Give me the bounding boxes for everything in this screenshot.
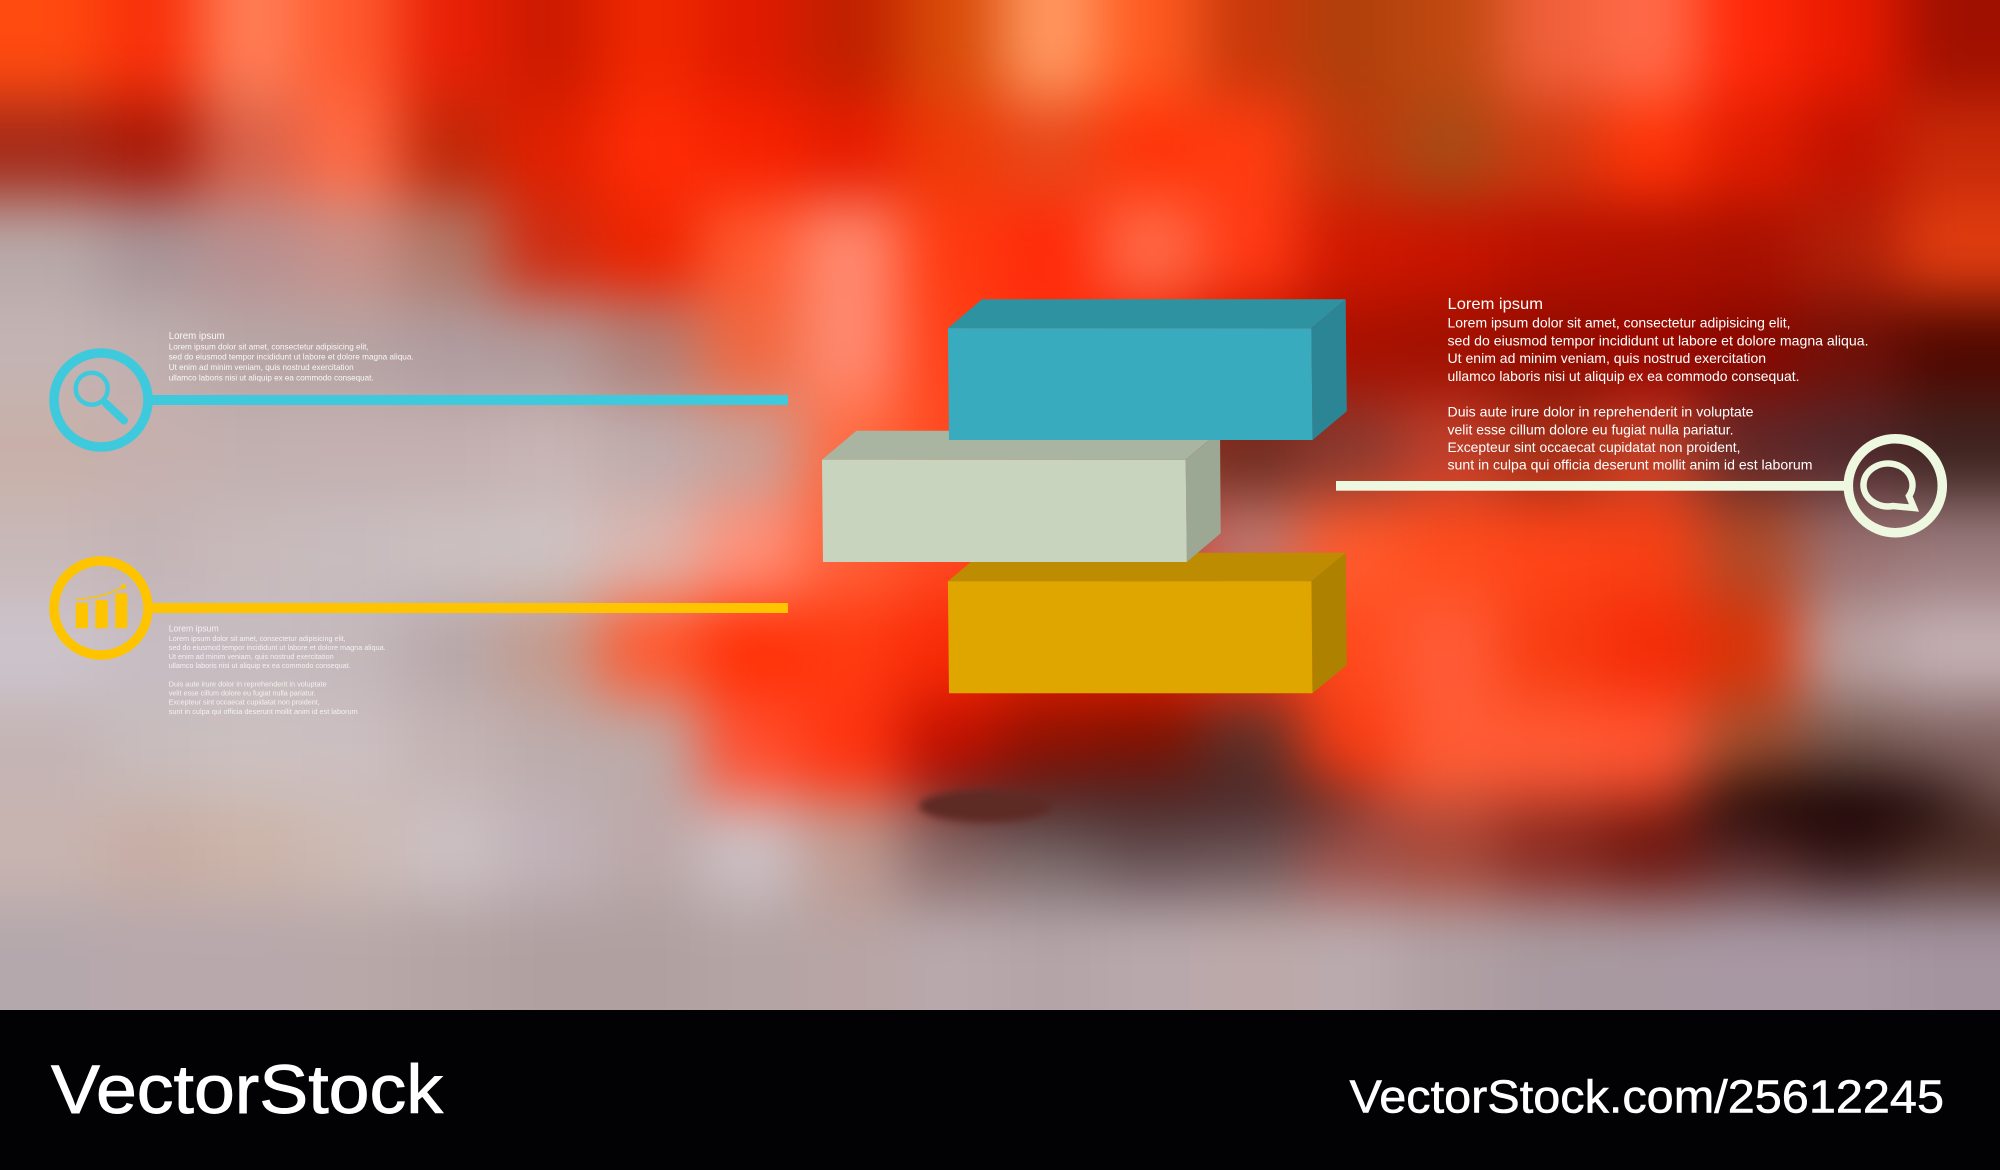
- text block: pale green callout: sed do eiusmod tempor incididunt ut labore et dolore magna aliqua.: [1448, 332, 1868, 348]
- footer logo text: VectorStock: [51, 1051, 444, 1128]
- icon: magnifier: [76, 373, 124, 420]
- text block: teal callout: sed do eiusmod tempor incididunt ut labore et dolore magna aliqua.: [169, 352, 414, 362]
- text block: yellow callout: Lorem ipsum: [169, 624, 219, 634]
- 3D bar: yellow bottom: [948, 553, 1347, 693]
- text block: yellow callout: Ut enim ad minim veniam, quis nostrud exercitation: [169, 652, 334, 661]
- text block: yellow callout: sed do eiusmod tempor incididunt ut labore et dolore magna aliqua.: [169, 643, 386, 652]
- text block: yellow callout: Excepteur sint occaecat cupidatat non proident,: [169, 698, 320, 707]
- text block: pale green callout: velit esse cillum dolore eu fugiat nulla pariatur.: [1448, 422, 1734, 438]
- text block: pale green callout: [1448, 296, 1868, 473]
- callout: pale green line with speech bubble icon: [1336, 439, 1942, 533]
- text block: pale green callout: ullamco laboris nisi ut aliquip ex ea commodo consequat.: [1448, 368, 1800, 384]
- text block: teal callout: ullamco laboris nisi ut aliquip ex ea commodo consequat.: [169, 372, 374, 382]
- text block: teal callout: [169, 331, 414, 382]
- text block: pale green callout: Ut enim ad minim veniam, quis nostrud exercitation: [1448, 350, 1766, 366]
- text block: pale green callout: Lorem ipsum: [1448, 296, 1543, 313]
- text block: teal callout: Ut enim ad minim veniam, quis nostrud exercitation: [169, 362, 354, 372]
- footer image url: VectorStock.com/25612245: [1350, 1071, 1944, 1123]
- text block: yellow callout: Duis aute irure dolor in reprehenderit in voluptate: [169, 680, 327, 689]
- text block: pale green callout: Duis aute irure dolor in reprehenderit in voluptate: [1448, 404, 1754, 420]
- text block: yellow callout: [169, 624, 386, 716]
- text block: pale green callout: sunt in culpa qui officia deserunt mollit anim id est laborum: [1448, 457, 1812, 473]
- text block: pale green callout: Excepteur sint occaecat cupidatat non proident,: [1448, 439, 1740, 455]
- text block: yellow callout: Lorem ipsum dolor sit amet, consectetur adipisicing elit,: [169, 634, 346, 643]
- callout: yellow line with bar chart icon: [54, 561, 788, 655]
- text block: yellow callout: velit esse cillum dolore eu fugiat nulla pariatur.: [169, 689, 316, 698]
- dark shadow ellipse under the bars: [919, 790, 1051, 822]
- text block: yellow callout: ullamco laboris nisi ut aliquip ex ea commodo consequat.: [169, 661, 351, 670]
- icon: speech bubble: [1863, 463, 1914, 508]
- icon: rising bars: [76, 584, 127, 628]
- footer bar: [0, 1010, 2000, 1170]
- text block: pale green callout: Lorem ipsum dolor sit amet, consectetur adipisicing elit,: [1448, 315, 1790, 331]
- text block: teal callout: Lorem ipsum dolor sit amet, consectetur adipisicing elit,: [169, 342, 369, 352]
- text block: yellow callout: sunt in culpa qui officia deserunt mollit anim id est laborum: [169, 707, 358, 716]
- text block: teal callout: Lorem ipsum: [169, 331, 225, 342]
- 3D bar: pale green middle: [822, 431, 1221, 562]
- callout: teal line with magnifier icon: [54, 353, 788, 447]
- 3D bar: teal top: [948, 299, 1347, 440]
